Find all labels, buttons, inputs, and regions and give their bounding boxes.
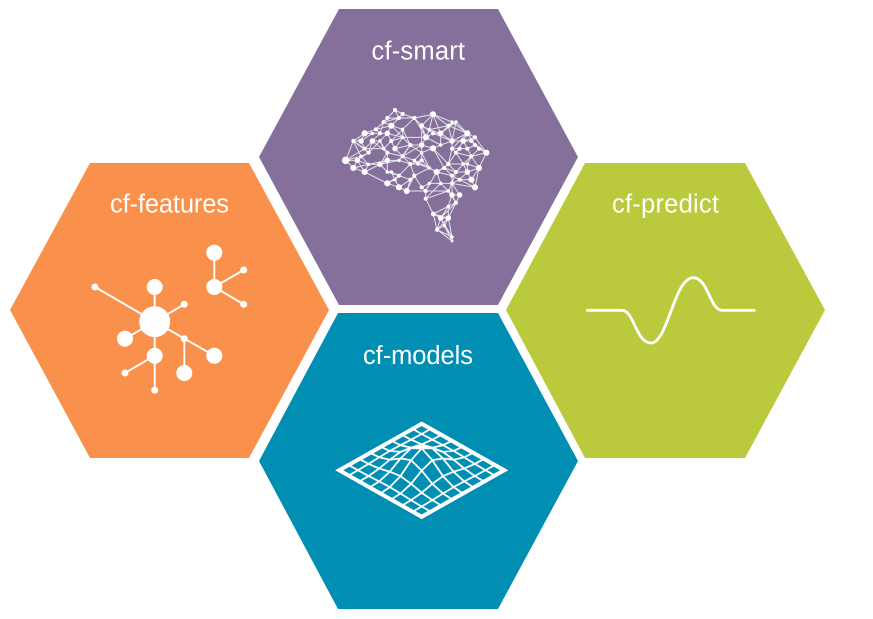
heading: cf-features: cf-features (110, 190, 229, 218)
panel: cf-predict (506, 163, 825, 458)
panel: cf-features (10, 163, 329, 458)
heading: cf-models: cf-models (363, 342, 473, 370)
heading: cf-smart: cf-smart (372, 38, 465, 66)
icon: feature network (92, 245, 247, 394)
panel: cf-smart (259, 9, 578, 305)
heading: cf-predict: cf-predict (612, 190, 719, 218)
panel: cf-models (259, 313, 578, 609)
icon: signal curve (587, 278, 754, 343)
icon: brain network (342, 108, 489, 242)
icon: surface mesh (339, 424, 504, 517)
